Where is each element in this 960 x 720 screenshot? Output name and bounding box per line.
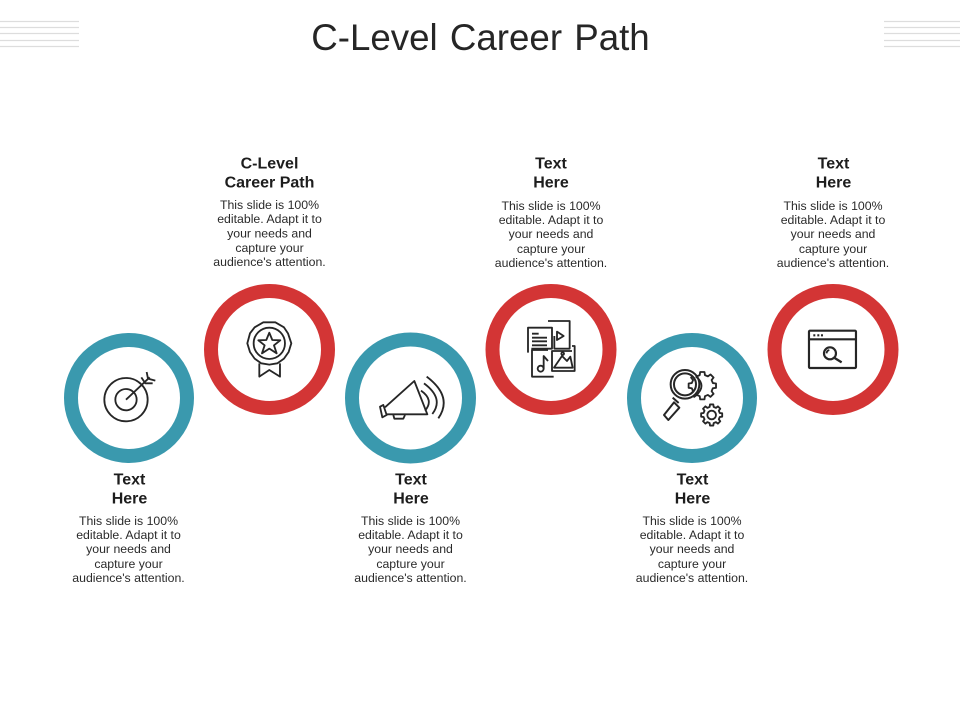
icon: target with arrow	[104, 372, 155, 421]
step 5 text: audience's attention.	[636, 571, 748, 585]
step 1 text: your needs and	[86, 542, 171, 556]
step 3: teal ring with megaphone icon	[352, 340, 469, 456]
step 4 text: your needs and	[509, 227, 594, 241]
step 3 text: capture your	[376, 557, 445, 571]
step 6 text: editable. Adapt it to	[781, 213, 885, 227]
step 5: teal ring with magnifier and gears icon	[634, 340, 750, 456]
step 4 text	[495, 156, 607, 270]
step 1 text	[72, 472, 185, 585]
step 2 text: your needs and	[227, 226, 312, 240]
step 2 text	[213, 156, 326, 269]
icon: megaphone	[380, 377, 444, 419]
step 6 text: your needs and	[791, 227, 876, 241]
step 6 text: capture your	[799, 242, 867, 256]
step 5 text: editable. Adapt it to	[640, 528, 744, 542]
step 4 text: This slide is 100%	[501, 199, 601, 213]
step 3 text: audience's attention.	[354, 571, 467, 585]
step 5 text: Here	[675, 491, 710, 508]
step 1 text: Text	[114, 472, 146, 489]
step 2 text: audience's attention.	[213, 255, 326, 269]
step 4 text: Here	[533, 175, 569, 192]
title: C-Level Career Path	[311, 17, 650, 58]
step 4 text: capture your	[517, 242, 585, 256]
step 2 text: Career Path	[225, 175, 314, 192]
step 6 text	[777, 156, 889, 270]
step 5 text: Text	[677, 472, 709, 489]
step 3 text	[354, 472, 467, 585]
step 5 text	[636, 472, 748, 585]
step 6 text: Text	[818, 156, 850, 173]
step 1 text: Here	[112, 491, 147, 508]
step 2 text: editable. Adapt it to	[217, 212, 322, 226]
step 4 text: audience's attention.	[495, 256, 607, 270]
step 6: red ring with browser search icon	[774, 291, 892, 408]
step 1 text: audience's attention.	[72, 571, 185, 585]
icon: award badge	[247, 322, 291, 377]
step 3 text: This slide is 100%	[361, 514, 460, 528]
step 4 text: Text	[535, 156, 568, 173]
step 2: red ring with award badge icon	[211, 291, 328, 408]
step 1 text: editable. Adapt it to	[76, 528, 181, 542]
step 6 text: Here	[816, 175, 851, 192]
step 4: red ring with media icon	[492, 291, 610, 408]
step 3 text: Text	[395, 472, 428, 489]
step 5 text: This slide is 100%	[642, 514, 742, 528]
step 5 text: capture your	[658, 557, 726, 571]
step 2 text: This slide is 100%	[220, 198, 319, 212]
step 6 text: audience's attention.	[777, 256, 889, 270]
step 3 text: your needs and	[368, 542, 453, 556]
icon: magnifier and gears	[664, 370, 722, 426]
step 1 text: capture your	[94, 557, 163, 571]
step 1: teal ring with target icon	[71, 340, 187, 456]
step 2 text: C-Level	[241, 156, 298, 173]
step 1 text: This slide is 100%	[79, 514, 178, 528]
icon: media documents	[528, 321, 575, 377]
step 5 text: your needs and	[650, 542, 735, 556]
step 3 text: Here	[393, 491, 429, 508]
step 6 text: This slide is 100%	[783, 199, 883, 213]
icon: browser search	[809, 331, 856, 368]
step 4 text: editable. Adapt it to	[499, 213, 603, 227]
step 2 text: capture your	[235, 241, 304, 255]
step 3 text: editable. Adapt it to	[358, 528, 463, 542]
